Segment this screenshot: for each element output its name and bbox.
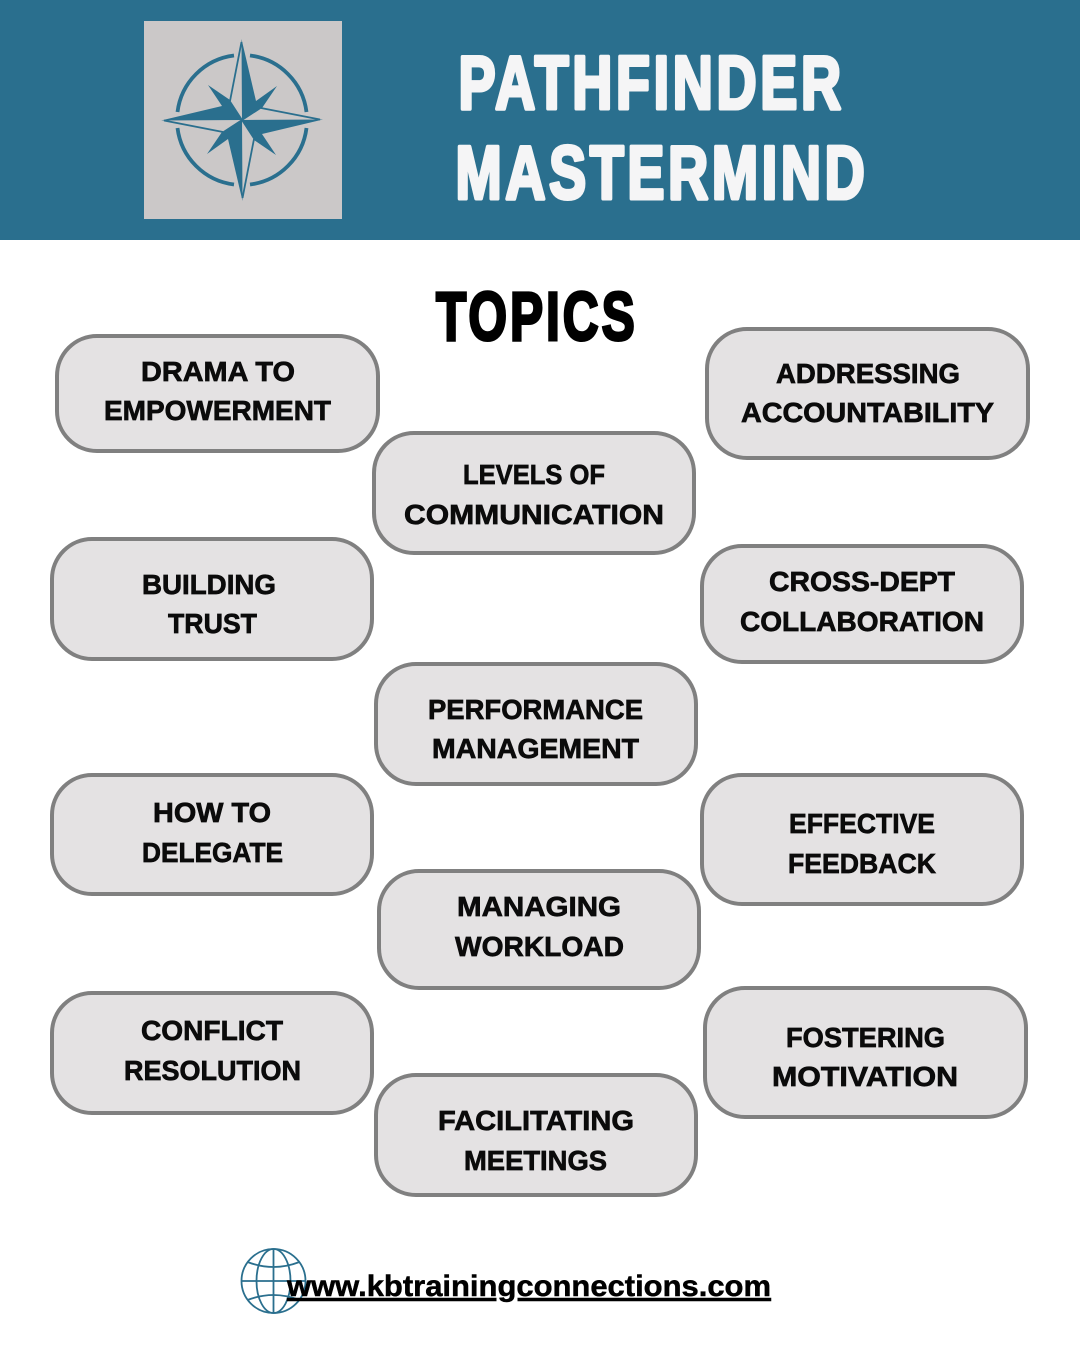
title: PATHFINDER [458,40,841,124]
topic: performance management: MANAGEMENT [432,733,639,764]
header band [0,0,1080,240]
topic: how to delegate [52,775,372,894]
icon: globe [242,1249,306,1313]
topic: fostering motivation: FOSTERING [786,1022,945,1053]
topic: performance management [376,664,696,784]
topic: conflict resolution [52,993,372,1113]
topic: cross-dept collaboration: COLLABORATION [740,606,984,637]
topic: fostering motivation: MOTIVATION [772,1061,958,1092]
topic: building trust: TRUST [168,608,257,639]
topic: managing workload [379,871,699,988]
topic: drama to empowerment: EMPOWERMENT [104,395,331,426]
heading: topics: TOPICS [436,278,635,355]
logo: compass rose on grey square [144,21,342,219]
topic: facilitating meetings [376,1075,696,1195]
topic: managing workload: WORKLOAD [455,931,624,962]
topic: addressing accountability: ACCOUNTABILITY [741,397,994,428]
title: MASTERMIND [456,130,865,214]
topic: addressing accountability [707,329,1028,458]
topic: managing workload: MANAGING [457,891,621,922]
topic: levels of communication: COMMUNICATION [404,499,664,530]
topic: drama to empowerment: DRAMA TO [141,356,295,387]
topic: how to delegate: HOW TO [153,797,271,828]
topic: building trust [52,539,372,659]
topic: building trust: BUILDING [142,569,276,600]
topic: fostering motivation [705,988,1026,1117]
topic: addressing accountability: ADDRESSING [776,358,960,389]
topic: facilitating meetings: FACILITATING [438,1105,634,1136]
topic: facilitating meetings: MEETINGS [464,1145,607,1176]
topic: how to delegate: DELEGATE [142,837,283,868]
website url: www.kbtrainingconnections.com [286,1270,771,1303]
topic: conflict resolution: RESOLUTION [124,1055,301,1086]
topic: effective feedback: FEEDBACK [788,848,936,879]
topic: effective feedback [702,775,1022,904]
topic: drama to empowerment [57,336,378,451]
topic: levels of communication: LEVELS OF [463,459,605,490]
topic: cross-dept collaboration: CROSS-DEPT [769,566,955,597]
topic: performance management: PERFORMANCE [428,694,643,725]
topic: levels of communication [374,433,694,553]
topic: cross-dept collaboration [702,546,1022,662]
topic: conflict resolution: CONFLICT [141,1015,283,1046]
topic: effective feedback: EFFECTIVE [789,808,935,839]
title [456,40,865,214]
